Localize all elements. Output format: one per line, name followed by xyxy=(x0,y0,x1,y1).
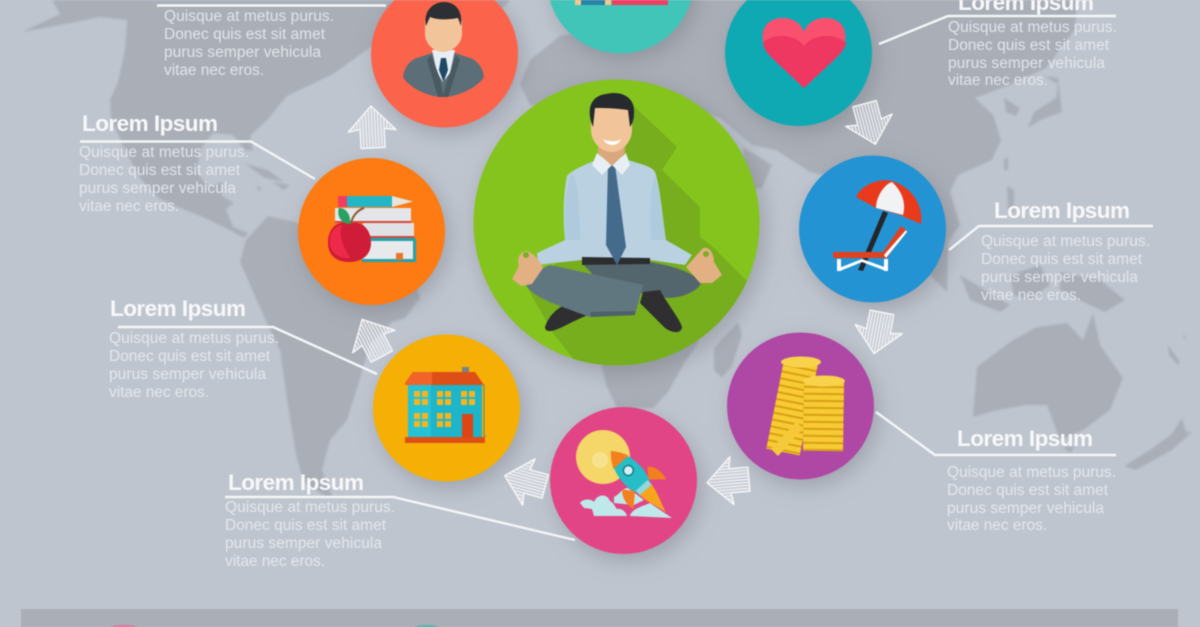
arrow: coins to rocket xyxy=(704,455,752,507)
connector line xyxy=(876,412,1116,455)
body text: Quisque at metus purus. xyxy=(225,499,395,516)
sleeve shading xyxy=(565,175,666,240)
neck xyxy=(598,145,625,166)
panel: education circle xyxy=(298,158,445,305)
callout: beach: purus semper vehicula xyxy=(981,269,1138,286)
callout: heart: purus semper vehicula xyxy=(948,55,1105,72)
dark teal circle xyxy=(725,0,872,126)
map: south america xyxy=(240,216,420,500)
callout: house: purus semper vehicula xyxy=(109,366,266,383)
blue circle xyxy=(799,156,946,302)
body text: Quisque at metus purus. xyxy=(164,8,334,25)
hands xyxy=(512,251,543,286)
map: eurasia xyxy=(520,0,1076,292)
body text: Quisque at metus purus. xyxy=(79,144,249,161)
icon: businessman xyxy=(403,2,484,97)
body text: Quisque at metus purus. xyxy=(947,464,1116,481)
callout: top left xyxy=(157,6,386,79)
arrows between circles xyxy=(340,97,906,510)
callout: beach: Donec quis est sit amet xyxy=(981,251,1143,268)
back leg xyxy=(582,262,701,298)
icon: cropped teal circle xyxy=(414,625,440,627)
bottom panel xyxy=(21,609,1178,627)
callout: rocket: Donec quis est sit amet xyxy=(225,517,387,534)
icon: gold coins xyxy=(771,356,845,456)
heading: Lorem Ipsum xyxy=(957,426,1093,451)
icon: moon and rocket xyxy=(576,430,683,528)
map: caribbean islands xyxy=(245,164,290,191)
coral circle xyxy=(371,0,518,128)
panel: wealth circle xyxy=(727,332,874,480)
purple circle xyxy=(727,332,874,480)
circle shadows xyxy=(303,0,950,561)
callout: coins: purus semper vehicula xyxy=(947,500,1104,517)
callout: beach xyxy=(949,198,1153,304)
amber circle xyxy=(373,334,520,482)
arrow: beach to coins xyxy=(850,307,906,359)
panel: leisure circle xyxy=(799,156,946,302)
callout: rocket: purus semper vehicula xyxy=(225,535,382,552)
callout: books: purus semper vehicula xyxy=(79,180,236,197)
icon: cropped pink circle xyxy=(110,625,138,627)
callout: heart xyxy=(879,0,1117,89)
callout: top left: Donec quis est sit amet xyxy=(164,26,326,43)
connector line xyxy=(949,226,1153,250)
map: madagascar xyxy=(714,322,742,378)
callout: beach: vitae nec eros. xyxy=(981,287,1081,304)
map: australia xyxy=(973,313,1123,440)
arrow: house to books xyxy=(340,307,404,369)
callout: books xyxy=(79,111,315,215)
heading: Lorem Ipsum xyxy=(110,296,246,321)
trouser cuff xyxy=(590,311,635,317)
map: philippines and taiwan xyxy=(1004,157,1014,212)
callout: top left: purus semper vehicula xyxy=(164,44,321,61)
connector line xyxy=(879,16,1116,44)
panel: career circle xyxy=(371,0,518,128)
collar xyxy=(592,153,630,175)
world map xyxy=(22,0,1192,500)
icon: cropped base xyxy=(575,0,668,5)
rocket xyxy=(594,436,683,528)
clouds xyxy=(580,495,627,516)
arrow: heart to beach xyxy=(841,97,899,151)
map: greenland and arctic xyxy=(420,0,510,34)
smile xyxy=(603,139,621,145)
callout: house: Donec quis est sit amet xyxy=(109,348,271,365)
map: arabia and east africa xyxy=(743,147,772,190)
icon: beach chair and umbrella xyxy=(833,180,921,271)
map: tasmania xyxy=(1062,447,1075,453)
shirt xyxy=(537,160,692,265)
map: japan and korea xyxy=(1004,76,1062,128)
callout: books: Donec quis est sit amet xyxy=(79,162,241,179)
heading: Lorem Ipsum xyxy=(228,470,364,495)
long shadow xyxy=(528,108,747,366)
panel: home circle xyxy=(373,334,520,482)
teal top circle xyxy=(547,0,694,54)
green circle xyxy=(474,80,760,366)
map: north america xyxy=(22,0,400,238)
callout: coins xyxy=(876,412,1116,534)
front leg xyxy=(526,265,643,317)
map: africa xyxy=(596,340,700,408)
heading: Lorem Ipsum xyxy=(82,111,218,136)
callout: heart: Donec quis est sit amet xyxy=(948,37,1110,54)
map: pacific islets xyxy=(1168,332,1186,365)
map: indonesia xyxy=(960,265,1125,312)
panel: family circle xyxy=(547,0,694,54)
callout: house: vitae nec eros. xyxy=(109,384,209,401)
callout: coins: vitae nec eros. xyxy=(947,517,1047,534)
orange circle xyxy=(298,158,445,305)
body text: Quisque at metus purus. xyxy=(981,233,1150,250)
face xyxy=(591,104,632,152)
heading: Lorem Ipsum xyxy=(994,198,1130,223)
pink circle xyxy=(550,407,697,554)
callout: books: vitae nec eros. xyxy=(79,198,179,215)
panel background xyxy=(21,609,1178,627)
tie xyxy=(606,165,626,265)
callout: top left: vitae nec eros. xyxy=(164,62,264,79)
figure xyxy=(512,93,722,332)
panel: dreams circle xyxy=(550,407,697,554)
hair xyxy=(590,93,634,127)
callout: coins: Donec quis est sit amet xyxy=(947,482,1109,499)
connector line xyxy=(225,497,575,540)
map: new zealand xyxy=(1124,418,1192,470)
callout: rocket: vitae nec eros. xyxy=(225,553,325,570)
icon: house xyxy=(405,367,486,443)
callout: rocket xyxy=(225,470,575,570)
arrow: rocket to house xyxy=(498,452,552,510)
connector line xyxy=(80,142,315,179)
body text: Quisque at metus purus. xyxy=(948,19,1117,36)
callout: house xyxy=(109,296,377,401)
icon: heart xyxy=(763,18,846,88)
shoes xyxy=(545,290,682,332)
callout: heart: vitae nec eros. xyxy=(948,72,1048,89)
panel: love circle xyxy=(725,0,872,126)
connector line xyxy=(118,327,377,374)
panel: central meditating man xyxy=(474,80,760,380)
icon: books and apple xyxy=(328,196,416,262)
connector line xyxy=(157,4,386,7)
body text: Quisque at metus purus. xyxy=(109,330,279,347)
belt xyxy=(582,257,650,265)
arrow: orange to coral xyxy=(347,104,397,150)
